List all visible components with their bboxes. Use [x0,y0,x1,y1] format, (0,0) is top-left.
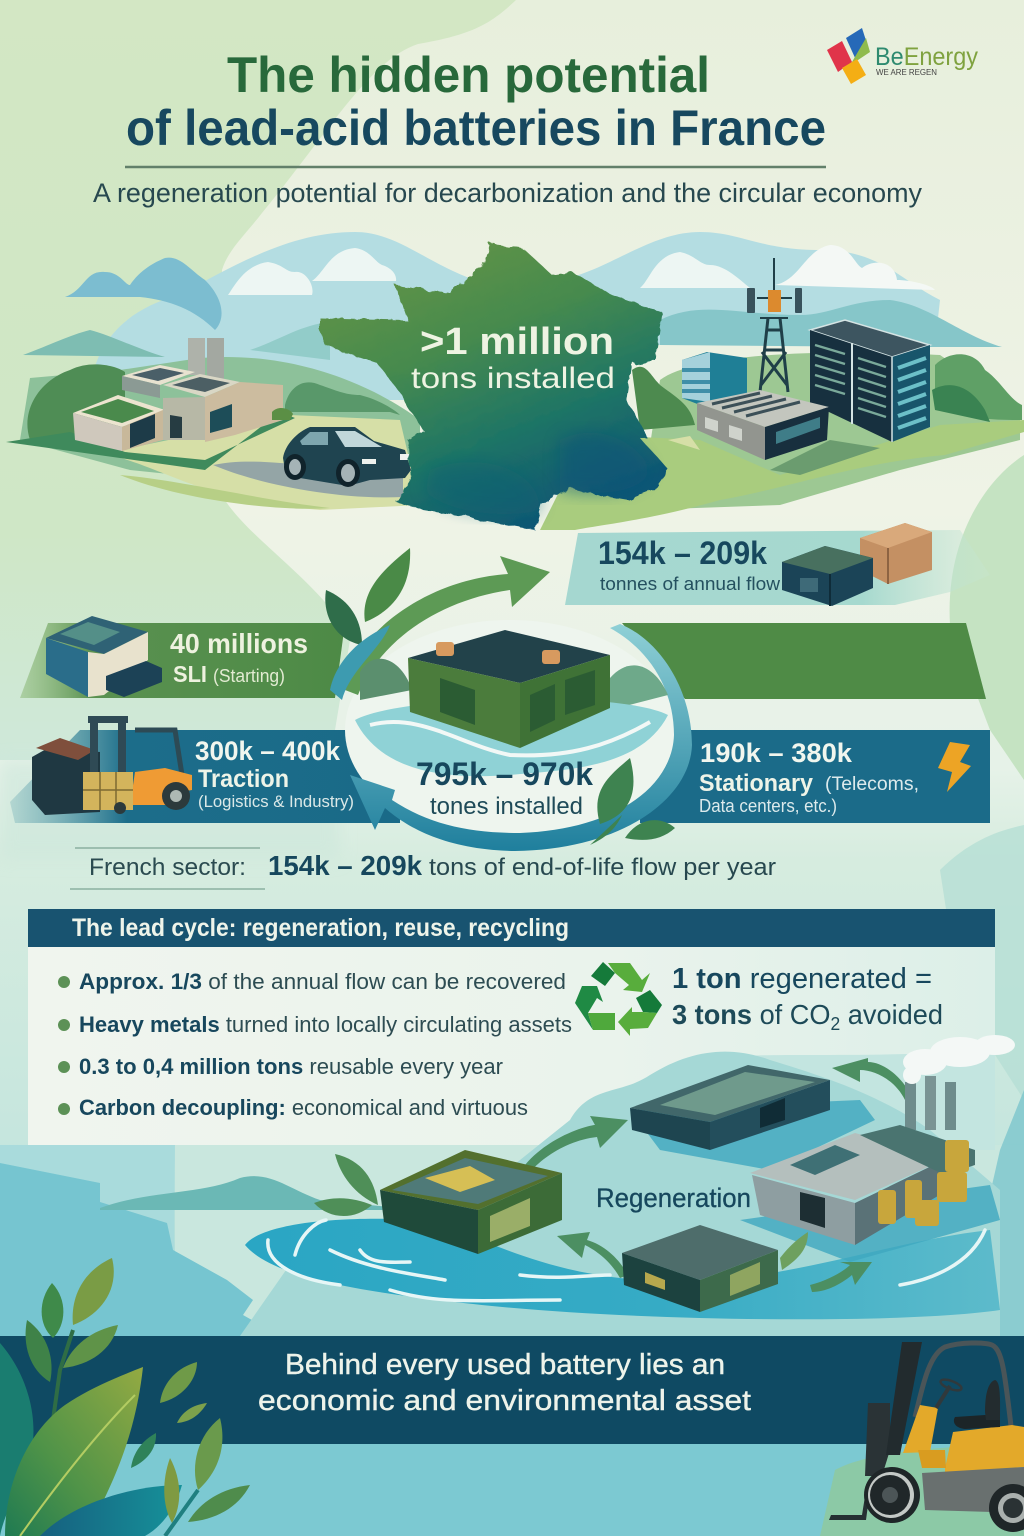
installed base circular diagram: 795k – 970k [416,756,593,792]
sky and hills left [6,232,490,510]
leaves [314,1154,378,1216]
traction labels: 300k – 400k [195,736,341,766]
title: of lead-acid batteries in France [126,100,826,156]
panel: annual flow: 154k – 209k [598,535,767,571]
icon: data center [697,320,930,460]
band: Traction [10,716,400,823]
icon: containers [782,523,932,606]
France map [320,243,669,530]
map label: >1 million [420,321,614,363]
band: Stationary: 190k – 380k [700,738,853,768]
landscape with industry, vehicle and telecoms [6,232,1024,530]
map label [411,321,615,395]
CO2 callout [672,963,943,1034]
regeneration cycle [240,1035,1015,1336]
logo: BeEnergy: BeEnergy [875,43,978,71]
installed base circular diagram [325,548,692,851]
heading [28,909,995,947]
footer banner: Behind every used battery lies an [285,1349,725,1381]
French sector statement: French sector: [89,854,246,881]
icon: blue office [682,352,747,405]
band: SLI: (Starting) [213,666,285,686]
band: right green [622,623,986,699]
panel: the lead cycle [28,909,995,1150]
panel: annual flow [565,523,990,606]
leaves [325,548,410,645]
icon: car [283,427,411,487]
icon: forklift with pallets [32,716,192,815]
regeneration cycle: Regeneration [596,1183,751,1213]
battery: spent [622,1225,808,1312]
smoke [903,1035,1015,1084]
low building [697,390,829,427]
battery: new [380,1150,562,1254]
icon: forklift [829,1342,1024,1532]
traction labels: Traction [198,765,289,793]
arrows [525,1058,912,1292]
band: Stationary: Stationary [699,770,814,797]
subtitle: A regeneration potential for decarbonization and the circular economy [93,178,922,208]
traction labels: (Logistics & Industry) [198,792,354,811]
battery [355,630,668,776]
icon: recycling [575,962,662,1036]
band: Stationary: (Telecoms, [825,774,919,795]
panel: annual flow: tonnes of annual flow [600,574,781,594]
band: SLI [20,616,345,698]
traction labels [195,736,354,811]
band: Stationary: Data centers, etc.) [699,796,837,816]
battery: rack [630,1065,830,1150]
band: Stationary [640,730,990,823]
footer banner: economic and environmental asset [258,1385,751,1417]
water and hills [240,1052,1000,1336]
logo: BeEnergy [827,28,978,84]
CO2 callout: avoided [840,999,943,1030]
bullet list: Heavy metals turned into locally circulating assets [79,1012,572,1037]
bullet list: Carbon decoupling: economical and virtuous [79,1095,528,1120]
icon: telecom tower [747,258,802,392]
bullet list: 0.3 to 0,4 million tons reusable every year [79,1054,503,1079]
bullet list: Approx. 1/3 of the annual flow can be recovered [79,969,566,994]
CO2 callout: 3 tons of CO [672,999,833,1030]
arrow: upward flow [345,556,550,695]
icon: factory [73,338,293,451]
bullet list [58,969,572,1120]
French sector statement [70,848,776,889]
icon: lightning bolt [938,742,971,792]
leaf [590,758,675,845]
icon: SLI battery [46,616,162,697]
CO2 callout: 2 [831,1014,840,1034]
band: SLI: SLI [173,661,207,687]
factory [750,1035,1015,1245]
footer banner [0,1336,1024,1444]
French sector statement: 154k – 209k [268,850,422,881]
title [125,47,826,167]
foliage bottom left [0,1258,250,1536]
band: SLI: 40 millions [170,628,308,659]
CO2 callout: 1 ton regenerated = [672,963,932,995]
installed base circular diagram: tones installed [430,793,583,820]
map label: tons installed [411,362,615,395]
French sector statement: tons of end-of-life flow per year [429,854,776,881]
heading: The lead cycle: regeneration, reuse, recycling [72,914,569,942]
sky and hills right [540,232,1024,530]
title: The hidden potential [227,47,710,103]
logo: BeEnergy: WE ARE REGEN [876,67,937,77]
